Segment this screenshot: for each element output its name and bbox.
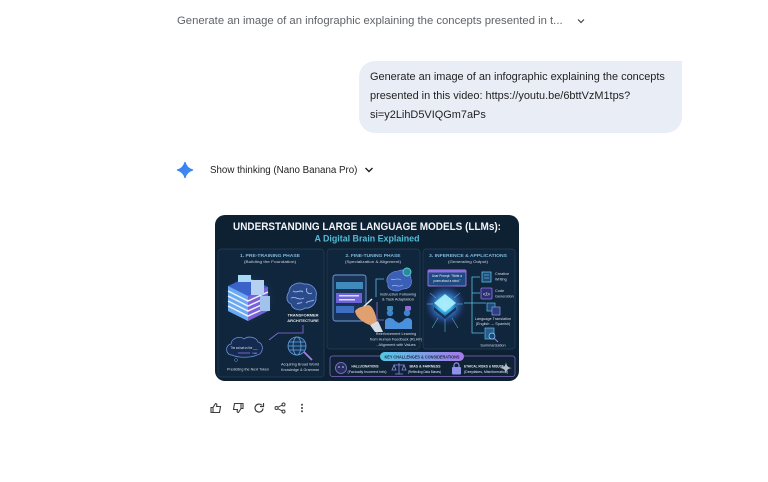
arrow: architecture to token [269, 325, 303, 340]
show thinking label: Show thinking (Nano Banana Pro) [210, 165, 357, 176]
creative writing label: Creative [495, 272, 509, 276]
panel: pre-training phase [218, 249, 324, 377]
infographic title [233, 221, 501, 244]
arrows: chip to outputs [464, 277, 486, 333]
icon: thinking chevron [365, 168, 373, 172]
ethical text: (Deepfakes, Misinformation) [464, 370, 509, 374]
ethical text: ETHICAL RISKS & MISUSE [464, 364, 504, 368]
icon: data server stack [228, 275, 270, 321]
icon: scales [392, 363, 406, 374]
icon: watermark sparkle [500, 362, 512, 374]
architecture label: ARCHITECTURE [287, 318, 319, 323]
user prompt bubble: si=y2LihD5VIQGm7aPs [370, 109, 486, 121]
knowledge label [281, 363, 319, 372]
architecture label [287, 314, 319, 322]
creative writing label: Writing [495, 278, 507, 282]
action icons row [210, 402, 303, 414]
user prompt bubble: Generate an image of an infographic explaining the concepts [370, 71, 665, 83]
icon: brain [287, 283, 316, 310]
feedback label: Reinforcement Learning [376, 332, 416, 336]
user prompt box: User Prompt: "Write a [432, 274, 462, 278]
panel: fine-tuning phase [327, 249, 423, 349]
icon: code generation: </> [483, 292, 490, 298]
feedback label: from Human Feedback (RLHF) [370, 338, 423, 342]
icon: magnifying globe [288, 337, 312, 360]
icon: translation [487, 303, 500, 315]
user prompt bubble [359, 61, 682, 133]
panel: pre-training phase: (Building the Foundation) [244, 259, 297, 264]
icon: padlock [452, 363, 461, 374]
icon: creative writing [482, 272, 491, 282]
feedback label [370, 332, 423, 347]
challenges pill [380, 352, 464, 361]
panel: key challenges [330, 352, 515, 376]
user prompt box: poem about a robot." [434, 279, 461, 283]
creative writing label [495, 272, 509, 282]
icon: glowing processor chip [426, 286, 464, 332]
knowledge label: Knowledge & Grammar [281, 367, 320, 372]
panel: inference and applications: 3. INFERENCE & APPLICATIONS [429, 253, 507, 258]
user prompt bubble: presented in this video: https://youtu.be/6bttVzM1tps? [370, 90, 630, 102]
icon: gear brain [387, 268, 412, 291]
icon: prediction cloud [227, 337, 262, 362]
icon: thumbs up [210, 403, 222, 413]
instruction label [380, 293, 416, 302]
icon: human feedback [385, 306, 412, 329]
icon: title chevron [578, 19, 584, 24]
icon: regenerate [254, 403, 264, 413]
challenges pill: KEY CHALLENGES & CONSIDERATIONS [384, 354, 460, 359]
icon: prediction cloud: mat [252, 351, 257, 355]
icon: summarization [485, 328, 498, 342]
conversation title: Generate an image of an infographic explaining the concepts presented in t... [177, 15, 563, 27]
code generation label [495, 290, 514, 298]
architecture label: TRANSFORMER [287, 312, 319, 318]
code generation label: Generation [495, 294, 514, 298]
translation label: (English → Spanish) [476, 322, 511, 326]
summarization label: Summarization [480, 344, 506, 348]
infographic image [215, 215, 519, 381]
feedback label: - Alignment with Values [376, 343, 416, 347]
bias text [408, 365, 441, 374]
icon: prediction cloud: The cat sat on the ___ [230, 346, 258, 350]
knowledge label: Acquiring Broad World [281, 362, 319, 366]
hallucinations text [348, 365, 386, 374]
panel: pre-training phase: 1. PRE-TRAINING PHASE [240, 253, 300, 258]
translation label [475, 317, 511, 326]
instruction label: Instruction Following [380, 292, 416, 296]
icon: share [274, 402, 286, 414]
hallucinations text: HALLUCINATIONS [352, 364, 379, 368]
bias text: BIAS & FAIRNESS [410, 364, 441, 368]
code generation label: Code [495, 289, 504, 293]
instruction label: & Task Adaptation [382, 296, 414, 302]
translation label: Language Translation [475, 317, 511, 321]
panel: inference and applications: (Generating Output) [448, 259, 489, 264]
icon: hallucination face [336, 362, 346, 374]
arrow: tablet to brain [376, 279, 384, 297]
bias text: (Reflecting Data Biases) [408, 370, 442, 374]
infographic title: UNDERSTANDING LARGE LANGUAGE MODELS (LLMs): [233, 221, 501, 233]
panel: inference and applications [423, 249, 515, 349]
user prompt box [428, 270, 466, 286]
icon: assistant spark [176, 162, 194, 178]
infographic title: A Digital Brain Explained [314, 232, 420, 244]
panel: fine-tuning phase: 2. FINE-TUNING PHASE [346, 253, 401, 258]
arrow: instruction to feedback [377, 302, 384, 320]
ethical text [464, 365, 508, 374]
icon: tablet with hand [333, 275, 383, 332]
icon: more menu [301, 404, 303, 412]
prediction label: Predicting the Next Token [227, 366, 269, 372]
panel: fine-tuning phase: (Specialization & Alignment) [345, 259, 402, 264]
icon: thumbs down [232, 403, 244, 413]
hallucinations text: (Factually Incorrect Info) [348, 370, 387, 374]
